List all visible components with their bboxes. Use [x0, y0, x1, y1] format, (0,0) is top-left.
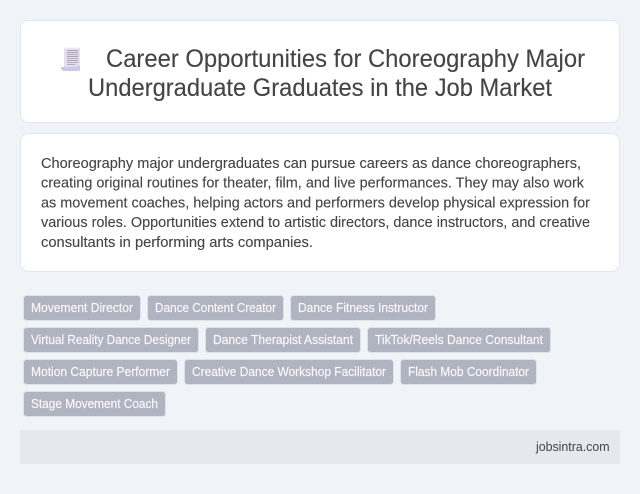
tag: Stage Movement Coach: [24, 392, 166, 416]
tag: TikTok/Reels Dance Consultant: TikTok/Reels Dance Consultant: [375, 333, 544, 347]
icon: document scroll: [61, 47, 80, 71]
tag: Dance Fitness Instructor: [290, 296, 436, 320]
tags: job titles: [24, 296, 550, 416]
panel: title card: [20, 20, 620, 122]
tag: Creative Dance Workshop Facilitator: [184, 360, 394, 384]
tag: TikTok/Reels Dance Consultant: [368, 328, 550, 352]
footer: site name: jobsintra.com: [535, 440, 610, 454]
panel: description: [20, 134, 620, 272]
tag: Flash Mob Coordinator: [400, 360, 536, 384]
tag: Dance Therapist Assistant: Dance Therapist Assistant: [213, 333, 354, 347]
tag: Creative Dance Workshop Facilitator: Creative Dance Workshop Facilitator: [192, 365, 386, 379]
text block: description paragraph: various roles. Opportunities extend to artistic directors, dance instructors, and creative: [41, 214, 590, 231]
tag: Dance Content Creator: Dance Content Creator: [155, 301, 276, 315]
text block: description paragraph: [41, 155, 590, 251]
tag: Stage Movement Coach: Stage Movement Coach: [31, 397, 158, 411]
tag: Motion Capture Performer: Motion Capture Performer: [31, 365, 170, 379]
tag: Flash Mob Coordinator: Flash Mob Coordinator: [408, 365, 529, 379]
tag: Virtual Reality Dance Designer: Virtual Reality Dance Designer: [31, 333, 191, 347]
tag: Dance Content Creator: [148, 296, 284, 320]
footer bar: [20, 430, 620, 464]
text block: description paragraph: as movement coaches, helping actors and performers develop physical expression for: [41, 194, 590, 212]
text block: description paragraph: consultants in performing arts companies.: [41, 234, 313, 251]
tag: Virtual Reality Dance Designer: [24, 328, 198, 352]
text block: description paragraph: Choreography major undergraduates can pursue careers as dance choreographers,: [41, 155, 581, 172]
tag: Dance Therapist Assistant: [206, 328, 360, 352]
title: [88, 45, 585, 102]
title: Undergraduate Graduates in the Job Market: [88, 74, 552, 102]
text block: description paragraph: creating original routines for theater, film, and live performances. They may also work: [41, 174, 584, 192]
tag: Motion Capture Performer: [24, 360, 178, 384]
tag: Dance Fitness Instructor: Dance Fitness Instructor: [298, 301, 428, 315]
tag: Movement Director: [24, 296, 140, 320]
title: Career Opportunities for Choreography Major: [106, 45, 585, 73]
tag: Movement Director: Movement Director: [31, 301, 133, 315]
